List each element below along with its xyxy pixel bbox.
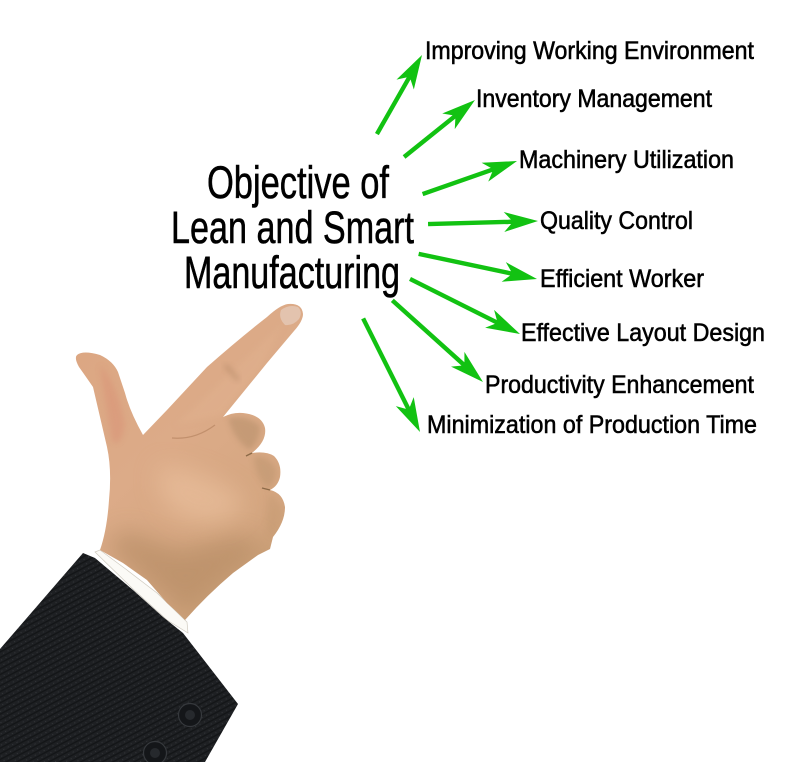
hand bbox=[76, 304, 303, 620]
label: Quality Control: Quality Control bbox=[540, 207, 693, 235]
label: Improving Working Environment: Improving Working Environment bbox=[425, 37, 754, 65]
illustration: pointing hand in suit sleeve bbox=[0, 304, 303, 762]
arrow: to Effective Layout Design bbox=[406, 270, 524, 343]
suit sleeve bbox=[0, 553, 238, 762]
fingernail bbox=[280, 306, 301, 325]
label: Effective Layout Design: Effective Layout Design bbox=[521, 319, 765, 347]
sleeve button: lower bbox=[144, 742, 166, 762]
arrow: to Inventory Management bbox=[398, 92, 481, 165]
title: Lean and Smart bbox=[171, 202, 414, 253]
arrow: to Productivity Enhancement bbox=[386, 293, 490, 389]
label: Machinery Utilization: Machinery Utilization bbox=[519, 146, 734, 174]
title: Objective of bbox=[207, 157, 389, 208]
arrow: to Machinery Utilization bbox=[419, 152, 520, 203]
arrow: to Quality Control bbox=[428, 211, 538, 234]
label: Inventory Management: Inventory Management bbox=[476, 85, 712, 113]
label: Minimization of Production Time: Minimization of Production Time bbox=[427, 411, 757, 439]
title: Manufacturing bbox=[184, 247, 400, 298]
arrow: to Efficient Worker bbox=[417, 244, 539, 289]
label: Productivity Enhancement: Productivity Enhancement bbox=[485, 371, 754, 399]
sleeve button: upper bbox=[178, 704, 202, 726]
arrow: to Minimization of Production Time bbox=[354, 314, 429, 436]
arrow: to Improving Working Environment bbox=[368, 50, 431, 139]
title bbox=[171, 157, 414, 298]
shirt cuff bbox=[95, 550, 188, 633]
label: Efficient Worker: Efficient Worker bbox=[540, 265, 704, 293]
